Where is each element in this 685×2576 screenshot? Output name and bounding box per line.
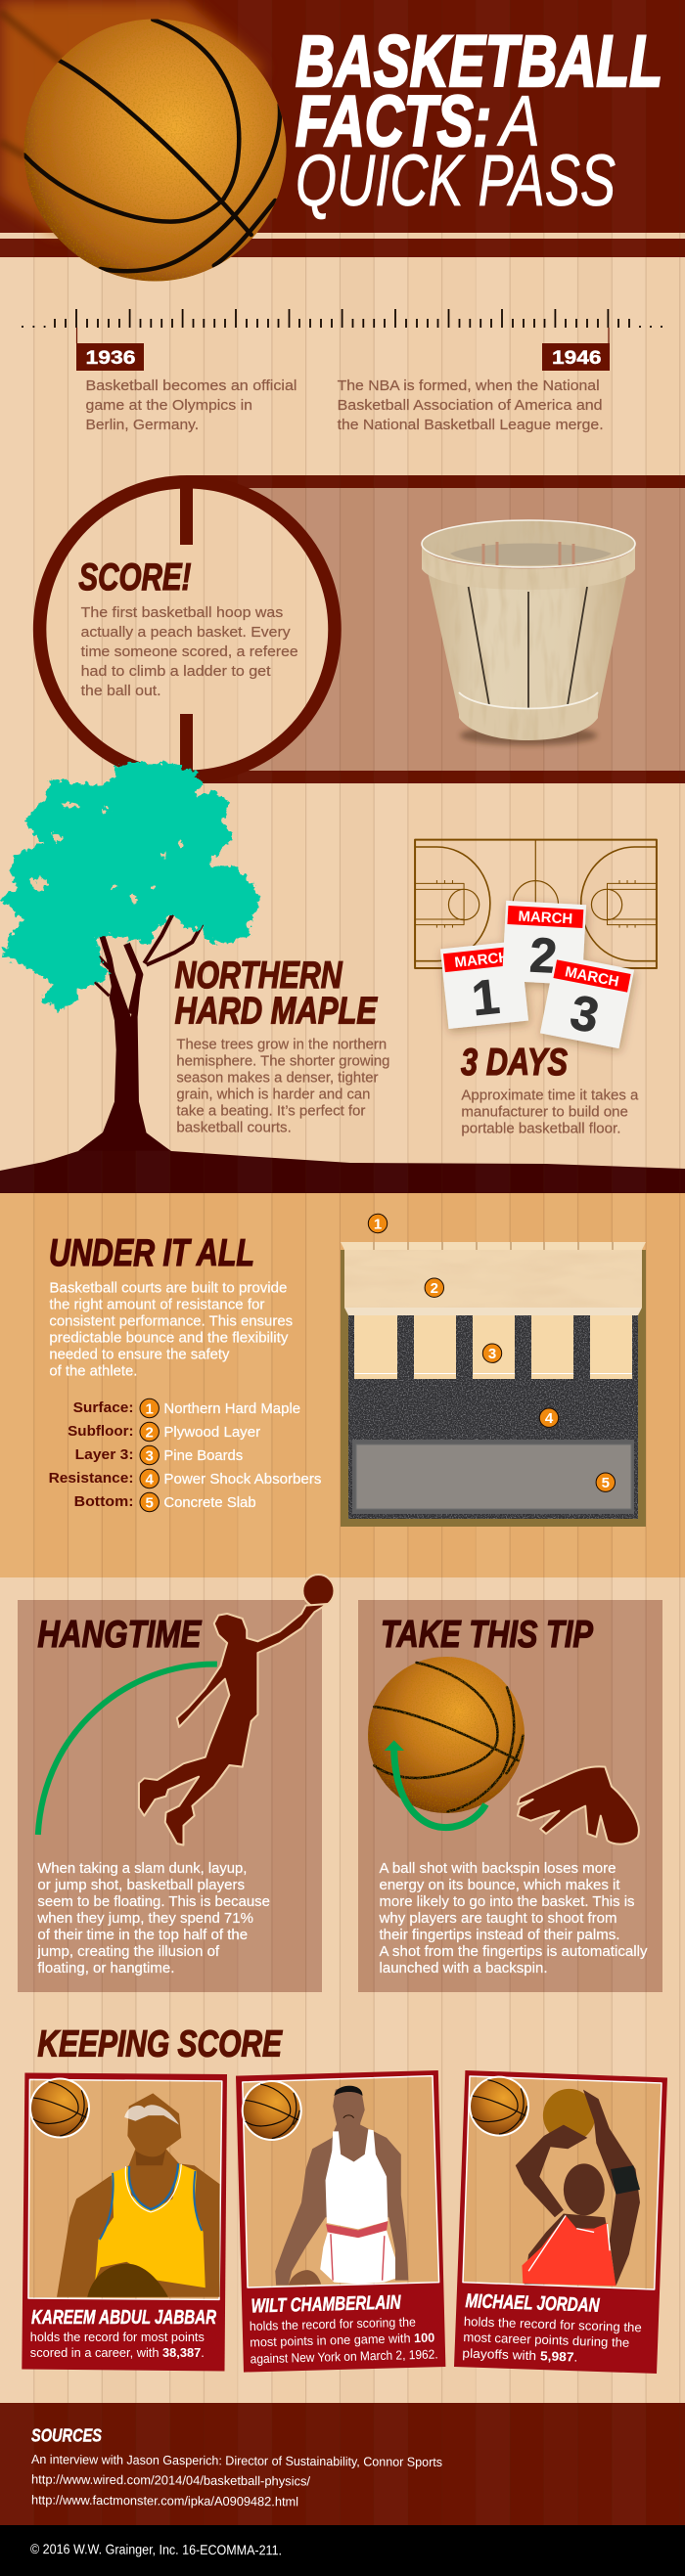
number badges: 5 <box>602 1475 610 1491</box>
calendar: March 1: 1 <box>470 969 502 1026</box>
hangtime panel content: jump, creating the illusion of <box>36 1943 220 1960</box>
timeline event: 1946: the National Basketball League merge. <box>338 417 604 433</box>
hangtime panel content: of their time in the top half of the <box>37 1927 248 1943</box>
Wilt portrait <box>275 2086 408 2286</box>
rubber layer <box>348 1315 638 1519</box>
under it all heading and copy: Basketball courts are built to provide <box>49 1280 287 1297</box>
under it all heading and copy: consistent performance. This ensures <box>49 1313 293 1330</box>
footer band <box>0 2525 685 2576</box>
basketball with motion blur <box>0 0 286 282</box>
legend row: resistance <box>49 1469 321 1488</box>
player card: Kareem Abdul Jabbar: KAREEM ABDUL JABBAR <box>31 2307 216 2329</box>
hangtime panel content: seem to be floating. This is because <box>37 1893 270 1910</box>
player card: Michael Jordan <box>454 2070 667 2374</box>
player card: Wilt Chamberlain: WILT CHAMBERLAIN <box>251 2291 401 2317</box>
legend row: bottom <box>74 1492 256 1512</box>
under it all heading and copy: the right amount of resistance for <box>49 1297 264 1313</box>
hangtime panel content: When taking a slam dunk, layup, <box>37 1860 247 1877</box>
northern hard maple text: take a beating. It’s perfect for <box>176 1102 365 1119</box>
3 days text: manufacturer to build one <box>461 1103 628 1120</box>
Jordan badge ball <box>469 2076 529 2137</box>
panel background: hangtime <box>18 1600 322 1992</box>
take this tip panel content: more likely to go into the basket. This is <box>380 1893 634 1910</box>
score text: The first basketball hoop was <box>81 604 283 621</box>
surface strip <box>341 1242 646 1250</box>
take this tip panel content: launched with a backspin. <box>380 1960 548 1976</box>
number badges <box>368 1214 615 1491</box>
northern hard maple text: NORTHERN <box>175 955 342 997</box>
player card: Kareem Abdul Jabbar: scored in a career, with 38,387. <box>30 2345 205 2360</box>
3 days text: portable basketball floor. <box>461 1120 620 1136</box>
layer legend <box>49 1399 321 1512</box>
northern hard maple text: These trees grow in the northern <box>176 1036 387 1052</box>
northern hard maple text: hemisphere. The shorter growing <box>176 1052 389 1069</box>
floor cross-section diagram <box>341 1214 646 1527</box>
under it all heading and copy: of the athlete. <box>49 1363 137 1380</box>
player card: Wilt Chamberlain: holds the record for scoring the <box>250 2315 416 2333</box>
3 days text: Approximate time it takes a <box>461 1087 639 1103</box>
player card: Kareem Abdul Jabbar <box>22 2073 227 2371</box>
number badges: 2 <box>431 1280 438 1297</box>
icon: backspin arrow <box>385 1740 485 1828</box>
under it all heading and copy: predictable bounce and the flexibility <box>49 1330 289 1347</box>
title: A <box>497 82 540 161</box>
under it all heading and copy: UNDER IT ALL <box>49 1232 254 1274</box>
plywood layer <box>344 1250 642 1308</box>
player card: Wilt Chamberlain <box>236 2070 445 2373</box>
score text: time someone scored, a referee <box>81 644 298 660</box>
calendar: March 3: MARCH <box>564 963 620 991</box>
header stripe <box>0 233 685 239</box>
take this tip panel content: A ball shot with backspin loses more <box>380 1860 616 1877</box>
title <box>296 21 662 221</box>
legend row: bottom: Bottom: <box>74 1493 134 1510</box>
sources band <box>0 2403 685 2525</box>
timeline event: 1936: game at the Olympics in <box>86 397 252 414</box>
tree foliage <box>0 763 261 1010</box>
timeline event: 1936 <box>76 328 297 433</box>
legend row: subfloor: 2 <box>146 1424 154 1442</box>
northern hard maple text: season makes a denser, tighter <box>176 1069 378 1086</box>
legend row: resistance: Power Shock Absorbers <box>163 1471 321 1488</box>
panel background: take this tip <box>358 1600 662 1992</box>
header lower band <box>0 239 685 257</box>
calendar: March 2: MARCH <box>518 909 573 927</box>
northern hard maple text <box>175 955 389 1135</box>
diagram frame <box>341 1250 646 1527</box>
calendar pages <box>440 901 634 1048</box>
take this tip panel content: their fingertips instead of their palms. <box>380 1927 620 1943</box>
player card: Michael Jordan: holds the record for scoring the <box>464 2314 642 2334</box>
hoop circle <box>40 482 335 777</box>
northern hard maple text: grain, which is harder and can <box>176 1086 370 1102</box>
legend row: bottom: 5 <box>146 1494 154 1512</box>
timeline event: 1946 <box>338 328 610 433</box>
timeline event: 1946: The NBA is formed, when the National <box>338 378 600 394</box>
timeline event: 1936: Basketball becomes an official <box>86 378 297 394</box>
take this tip panel content: why players are taught to shoot from <box>378 1910 616 1927</box>
hangtime panel content: HANGTIME <box>37 1614 202 1656</box>
score top band <box>187 475 685 488</box>
legend row: layer 3: 3 <box>146 1447 154 1465</box>
calendar: March 2: 2 <box>528 927 559 984</box>
take this tip panel content: A shot from the fingertips is automatically <box>380 1943 648 1960</box>
pine boards <box>354 1315 632 1379</box>
legend row: layer 3 <box>75 1445 243 1465</box>
player card: Kareem Abdul Jabbar: holds the record for most points <box>30 2330 205 2344</box>
3 days text: 3 DAYS <box>461 1042 568 1084</box>
legend row: layer 3: Pine Boards <box>163 1447 243 1464</box>
legend row: resistance: Resistance: <box>49 1470 134 1487</box>
number badges: 1 <box>374 1217 382 1232</box>
timeline event: 1936: Berlin, Germany. <box>86 417 199 433</box>
player card: Michael Jordan: MICHAEL JORDAN <box>465 2290 600 2317</box>
score section brown panel <box>187 488 685 771</box>
concrete slab <box>352 1440 634 1514</box>
legend row: bottom: Concrete Slab <box>163 1494 256 1511</box>
Wilt badge ball <box>242 2080 302 2141</box>
Jordan portrait <box>516 2089 640 2286</box>
hangtime panel content: floating, or hangtime. <box>37 1960 174 1976</box>
icon: player silhouette <box>139 1575 334 1845</box>
under it all heading and copy <box>49 1232 293 1380</box>
3 days text <box>461 1042 639 1136</box>
sources: An interview with Jason Gasperich: Director of Sustainability, Connor Sports <box>31 2452 443 2469</box>
timeline ruler <box>23 309 662 328</box>
take this tip panel content: TAKE THIS TIP <box>381 1614 594 1656</box>
player card: Wilt Chamberlain: against New York on March 2, 1962. <box>250 2346 438 2366</box>
legend row: resistance: 4 <box>146 1471 155 1488</box>
keeping score heading: KEEPING SCORE <box>37 2024 283 2065</box>
calendar: March 3: 3 <box>567 985 604 1044</box>
court diagram <box>415 840 657 968</box>
hangtime panel content: when they jump, they spend 71% <box>36 1910 253 1927</box>
player card: Michael Jordan: playoffs with 5,987. <box>462 2346 578 2365</box>
legend row: subfloor: Plywood Layer <box>163 1424 260 1441</box>
score text: the ball out. <box>81 683 161 699</box>
northern hard maple text: basketball courts. <box>176 1119 292 1135</box>
sources: http://www.factmonster.com/ipka/A0909482.html <box>31 2493 298 2509</box>
icon: shooting hand <box>518 1766 639 1844</box>
Kareem portrait <box>57 2093 220 2297</box>
title: FACTS: <box>296 82 491 161</box>
peach basket illustration <box>422 520 635 745</box>
legend row: surface: 1 <box>146 1400 154 1418</box>
number badges: 3 <box>488 1346 496 1362</box>
legend row: surface: Surface: <box>73 1399 134 1416</box>
timeline event: 1946: 1946 <box>552 348 601 369</box>
icon: basketball with backspin <box>368 1657 525 1813</box>
legend row: surface <box>73 1399 300 1418</box>
sources: SOURCES <box>31 2425 102 2445</box>
legend row: subfloor <box>68 1422 260 1442</box>
tree illustration <box>0 763 261 1151</box>
hangtime panel content: or jump shot, basketball players <box>37 1877 245 1893</box>
timeline event: 1946: Basketball Association of America and <box>338 397 603 414</box>
calendar: March 2 <box>502 901 586 985</box>
sources <box>31 2425 443 2509</box>
score text: had to climb a ladder to get <box>81 663 271 680</box>
timeline event: 1936: 1936 <box>86 348 135 369</box>
under it all heading and copy: needed to ensure the safety <box>49 1347 230 1363</box>
calendar: March 1: MARCH <box>454 949 510 971</box>
score bottom band <box>187 771 685 783</box>
player card: Wilt Chamberlain: most points in one game with 100 <box>250 2331 434 2349</box>
score text: SCORE! <box>78 556 191 599</box>
header banner <box>0 0 685 233</box>
calendar: March 1 <box>440 941 528 1029</box>
score text <box>78 556 298 699</box>
take this tip panel content: energy on its bounce, which makes it <box>380 1877 620 1893</box>
number badges: 4 <box>545 1410 554 1427</box>
background: darker court section <box>0 1193 685 1577</box>
take this tip panel content <box>368 1614 648 1976</box>
player card: Michael Jordan: most career points during the <box>463 2330 630 2350</box>
northern hard maple text: HARD MAPLE <box>175 991 378 1033</box>
calendar: March 3 <box>540 955 634 1048</box>
ground silhouette <box>0 1133 685 1193</box>
legend row: subfloor: Subfloor: <box>68 1423 134 1440</box>
icon: green jump arc <box>38 1665 217 1835</box>
sources: http://www.wired.com/2014/04/basketball-physics/ <box>31 2472 310 2488</box>
copyright footer: © 2016 W.W. Grainger, Inc. 16-ECOMMA-211. <box>30 2541 282 2557</box>
score text: actually a peach basket. Every <box>81 624 291 641</box>
tree trunk and branches <box>78 914 204 1151</box>
hangtime panel content <box>36 1575 334 1976</box>
legend row: layer 3: Layer 3: <box>75 1446 134 1463</box>
Kareem badge ball <box>29 2077 90 2138</box>
legend row: surface: Northern Hard Maple <box>163 1400 300 1417</box>
